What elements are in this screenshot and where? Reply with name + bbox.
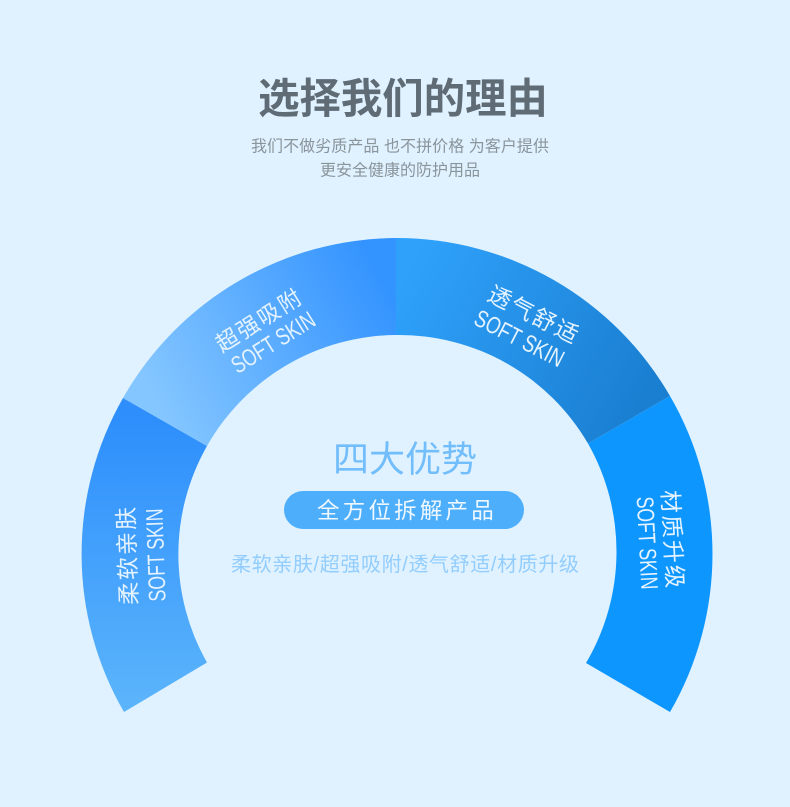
segment: 透气舒适: SOFT SKIN (470, 305, 568, 373)
pill label (284, 491, 524, 529)
segment: 超强吸附: SOFT SKIN (226, 307, 321, 379)
segment: 材质升级 (586, 396, 712, 712)
segment: 超强吸附: 超强吸附 (211, 284, 308, 357)
segment: 柔软亲肤 (82, 398, 207, 712)
segment: 柔软亲肤: 柔软亲肤 (113, 505, 142, 605)
center heading: 四大优势 (333, 438, 477, 480)
pill label: 全方位拆解产品 (317, 498, 497, 524)
arc chart: four advantages (82, 238, 712, 712)
segment: 超强吸附 (123, 238, 396, 446)
segment: 透气舒适: 透气舒适 (484, 281, 584, 349)
segment: 材质升级: 材质升级 (657, 489, 688, 591)
subtitle (251, 138, 549, 180)
title: 选择我们的理由 (258, 76, 548, 122)
segment: 材质升级: SOFT SKIN (631, 496, 662, 590)
center description: 柔软亲肤/超强吸附/透气舒适/材质升级 (231, 553, 579, 576)
segment: 透气舒适 (396, 238, 670, 444)
subtitle: 更安全健康的防护用品 (320, 162, 480, 180)
subtitle: 我们不做劣质产品 也不拼价格 为客户提供 (251, 138, 549, 156)
segment: 柔软亲肤: SOFT SKIN (141, 508, 172, 602)
